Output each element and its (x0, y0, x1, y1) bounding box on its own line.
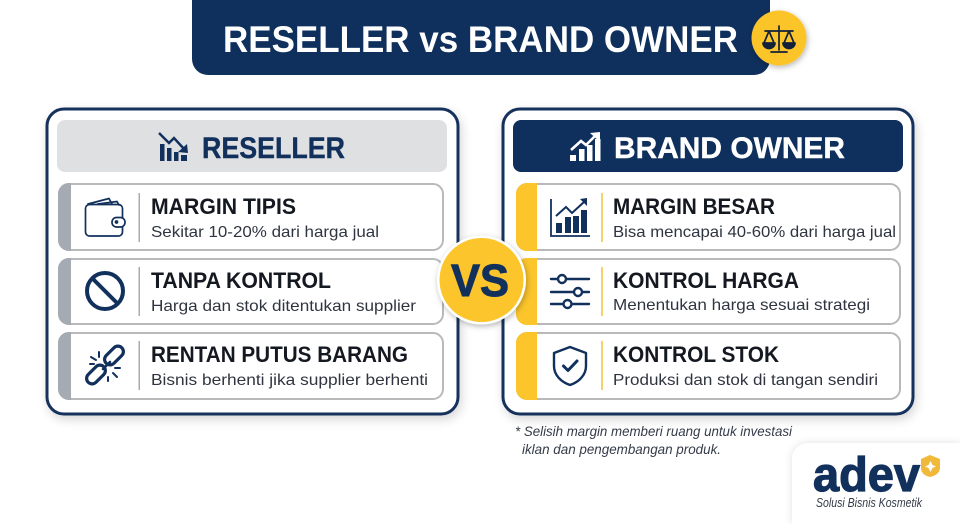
row: margin tipis: Sekitar 10-20% dari harga jual (151, 224, 379, 241)
row: margin tipis (58, 183, 443, 251)
row: rentan putus barang: Bisnis berhenti jika supplier berhenti (151, 372, 428, 389)
brand owner header (513, 120, 903, 172)
icon: shield check (554, 347, 586, 385)
row: kontrol harga (516, 258, 900, 325)
title banner: RESELLER vs BRAND OWNER (223, 19, 738, 60)
footnote (515, 423, 793, 457)
row: tanpa kontrol: TANPA KONTROL (151, 268, 331, 293)
reseller header: RESELLER (202, 132, 345, 165)
icon: broken chain (84, 344, 126, 386)
footnote: * Selisih margin memberi ruang untuk investasi (515, 423, 793, 439)
row: rentan putus barang (58, 332, 443, 400)
row: rentan putus barang: RENTAN PUTUS BARANG (151, 342, 408, 367)
panel: brand owner (503, 109, 913, 414)
vs badge: VS (451, 255, 509, 306)
vs badge (437, 236, 526, 324)
reseller header (57, 120, 447, 172)
row: tanpa kontrol: Harga dan stok ditentukan supplier (151, 298, 417, 315)
row: margin besar: Bisa mencapai 40-60% dari harga jual (613, 224, 896, 241)
brand owner header: BRAND OWNER (614, 132, 845, 165)
footnote: iklan dan pengembangan produk. (522, 441, 721, 457)
logo card (792, 443, 960, 524)
row: kontrol stok: KONTROL STOK (613, 342, 779, 367)
row: margin besar: MARGIN BESAR (613, 194, 775, 219)
row: kontrol stok: Produksi dan stok di tangan sendiri (613, 372, 878, 389)
icon: balance scale (752, 10, 806, 66)
icon: prohibited (87, 273, 123, 309)
row: kontrol stok (516, 332, 900, 400)
icon: logo shield (921, 455, 940, 477)
title banner (192, 0, 770, 75)
row: margin tipis: MARGIN TIPIS (151, 194, 296, 219)
row: kontrol harga: KONTROL HARGA (613, 268, 799, 293)
row: tanpa kontrol (58, 258, 443, 325)
row: kontrol harga: Menentukan harga sesuai strategi (613, 297, 870, 314)
icon: sliders (551, 275, 589, 308)
logo wordmark: adev (813, 449, 920, 502)
icon: declining chart (159, 133, 188, 161)
logo tagline: Solusi Bisnis Kosmetik (816, 496, 923, 510)
icon: wallet (86, 198, 125, 236)
icon: bar chart with arrow (551, 198, 590, 236)
panel: reseller (47, 109, 458, 414)
icon: rising chart (570, 132, 600, 161)
row: margin besar (516, 183, 900, 251)
